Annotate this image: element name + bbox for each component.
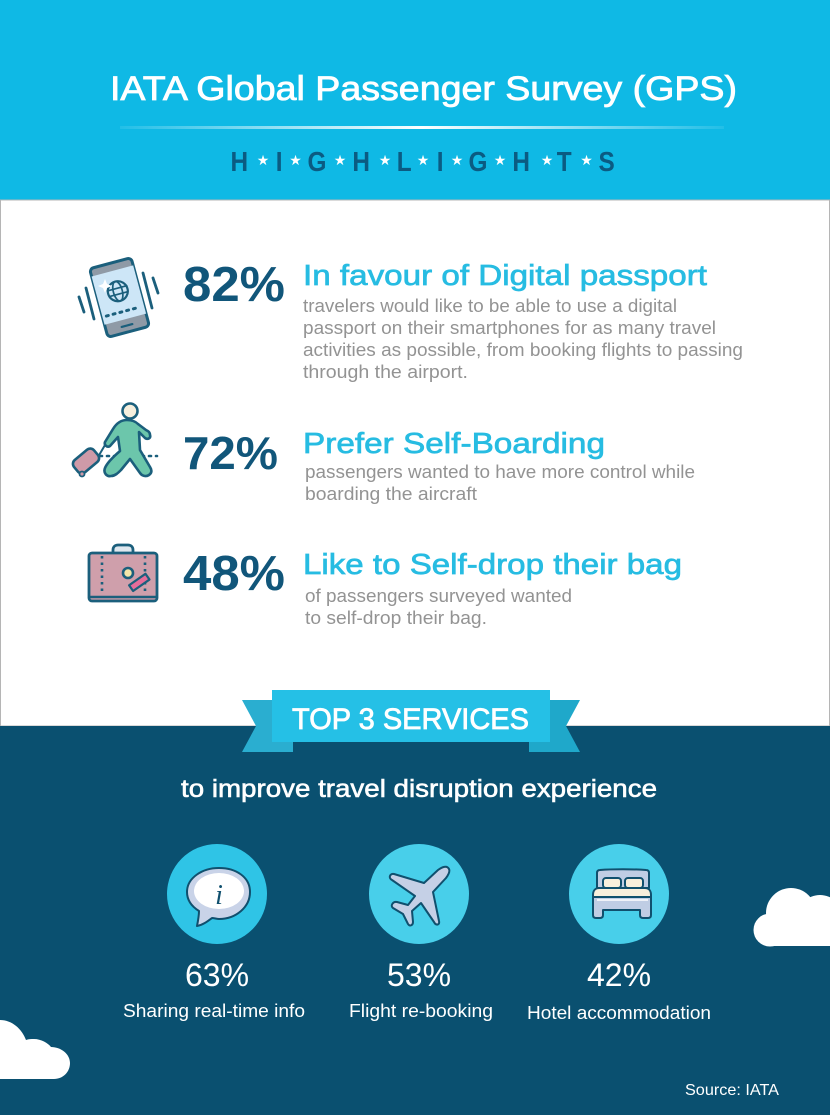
text: self-drop description [305,586,572,628]
panel: header [0,0,830,200]
subtitle: highlights: ★★★★★★★★★ [257,153,593,169]
service: flight re-booking [349,844,493,1021]
label: flight re-booking: Flight re-booking [349,1001,493,1021]
icon: info speech bubble [187,868,250,926]
text: digital passport description: through the airport. [303,362,468,382]
stat: 72%: 72% [183,427,278,479]
row: self-boarding [71,404,695,504]
icon: smartphone with globe [79,258,158,337]
title: IATA Global Passenger Survey (GPS) [110,70,737,108]
icon: airplane [390,867,449,925]
icon: briefcase [89,545,157,601]
subtitle: highlights: HIGHLIGHTS [231,145,615,177]
text: self-boarding description [305,462,695,504]
label: sharing real-time info: Sharing real-time info [123,1001,305,1021]
text: self-drop description: to self-drop their bag. [305,608,487,628]
text: self-drop description: of passengers surveyed wanted [305,586,572,606]
cloud: right [754,888,830,946]
cloud: left [0,1020,70,1079]
subheading: to improve travel disruption experience [181,775,657,803]
icon: bed [593,869,651,918]
service: hotel accommodation [527,844,711,1023]
stat: 53%: 53% [387,957,451,993]
text: self-boarding description: boarding the aircraft [305,484,477,504]
heading: digital passport: In favour of Digital passport [303,260,707,292]
panel: top 3 services [0,690,830,1115]
text: digital passport description: passport on their smartphones for as many travel [303,318,716,338]
stat: 48%: 48% [183,547,285,601]
label: hotel accommodation: Hotel accommodation [527,1003,711,1023]
stat: 82%: 82% [183,258,285,312]
panel: survey results [0,200,830,726]
text: self-boarding description: passengers wanted to have more control while [305,462,695,482]
icon: info speech bubble: i [215,880,223,911]
banner: top 3 services: TOP 3 SERVICES [292,703,529,736]
heading: self-boarding: Prefer Self-Boarding [303,428,605,460]
stat: 42%: 42% [587,957,651,993]
row: digital passport [79,258,743,382]
banner: top 3 services [242,690,580,752]
text: digital passport description: activities as possible, from booking flights to passing [303,340,743,360]
heading: self-drop bag: Like to Self-drop their bag [303,549,682,581]
service: real-time info [123,844,305,1021]
text: digital passport description: travelers would like to be able to use a digital [303,296,677,316]
row: self-drop bag [89,545,682,628]
text: digital passport description [303,296,743,382]
source: Source: IATA [685,1082,779,1099]
stat: 63%: 63% [185,957,249,993]
icon: traveller with suitcase [71,404,157,476]
